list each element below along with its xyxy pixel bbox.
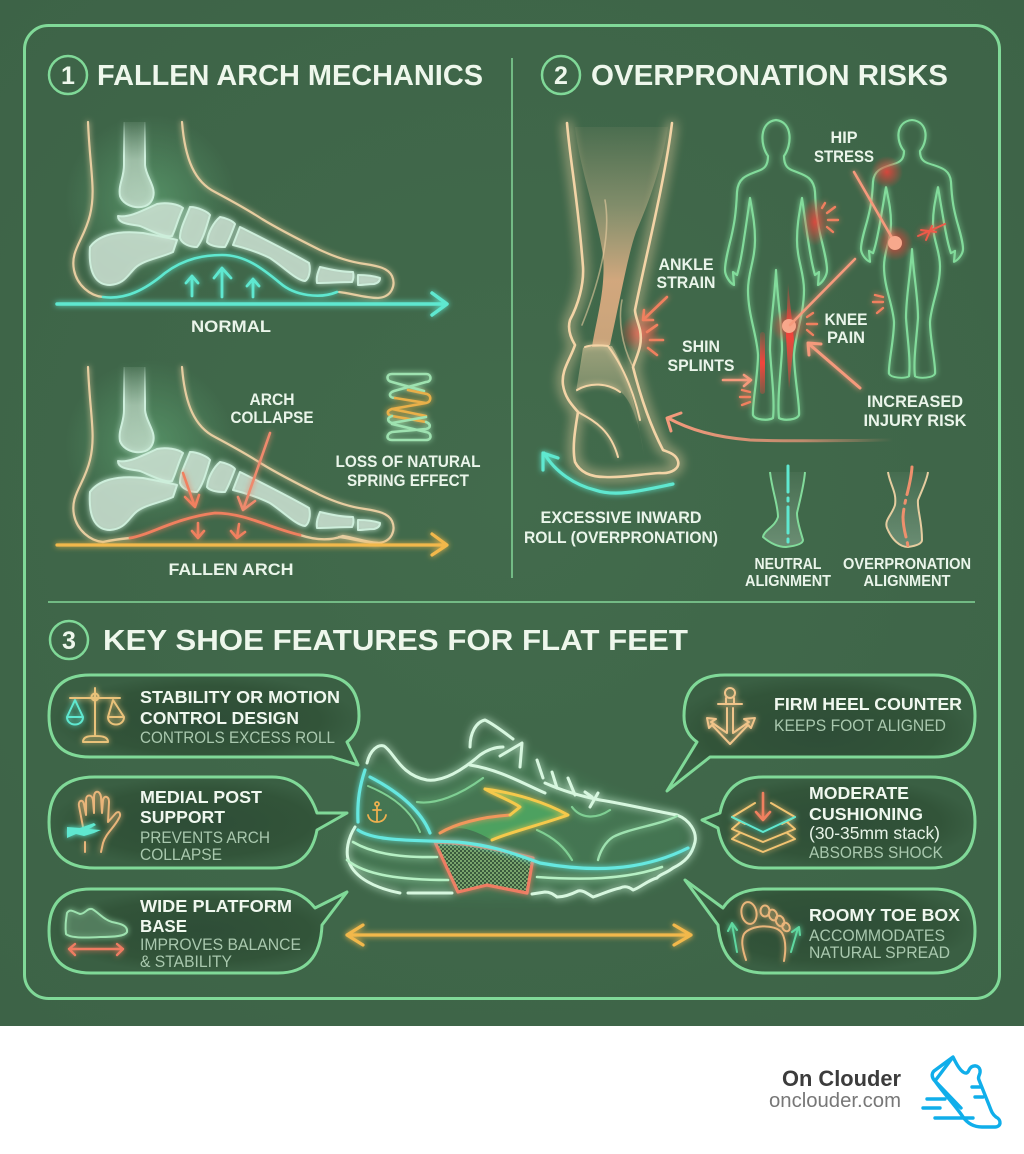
label: knee pain: PAIN bbox=[827, 328, 865, 347]
callout: medial post support: PREVENTS ARCH bbox=[140, 829, 270, 847]
callout: roomy toe box: ACCOMMODATES bbox=[809, 927, 945, 945]
callout: roomy toe box: NATURAL SPREAD bbox=[809, 944, 950, 962]
panel: key shoe features bbox=[49, 621, 975, 973]
label: arch collapse bbox=[230, 390, 314, 427]
line from knee to body bbox=[790, 259, 855, 325]
logo: On Clouder: On Clouder bbox=[782, 1066, 901, 1091]
callout: medial post support: MEDIAL POST bbox=[140, 787, 262, 807]
label: hip stress bbox=[814, 128, 874, 166]
callout: moderate cushioning: CUSHIONING bbox=[809, 804, 923, 824]
panel: fallen arch mechanics bbox=[49, 56, 483, 579]
label: fallen arch: FALLEN ARCH bbox=[168, 560, 294, 579]
label: arch collapse: ARCH bbox=[250, 390, 294, 409]
heading: section 2: OVERPRONATION RISKS bbox=[591, 60, 948, 92]
callout: stability or motion control bbox=[49, 675, 359, 765]
label: shin splints: SHIN bbox=[682, 337, 720, 356]
label: neutral alignment bbox=[745, 556, 831, 590]
cyan heel and midline bbox=[358, 770, 688, 869]
heading: section 1: 1 bbox=[61, 62, 75, 90]
icon: neutral alignment bbox=[763, 466, 805, 547]
label: arch collapse: COLLAPSE bbox=[230, 408, 314, 427]
callout: stability or motion control: CONTROL DESIGN bbox=[140, 708, 299, 728]
label: excessive inward roll bbox=[524, 508, 718, 547]
mesh panel bbox=[435, 842, 533, 893]
label: neutral alignment: NEUTRAL bbox=[754, 556, 822, 573]
swoosh fill bbox=[440, 789, 568, 840]
heading: section 3: 3 bbox=[62, 627, 76, 655]
callout: firm heel counter bbox=[667, 675, 975, 791]
callout: stability or motion control: CONTROLS EXCESS ROLL bbox=[140, 729, 335, 747]
illustration: ankle rear view bbox=[563, 123, 678, 477]
callout: moderate cushioning: MODERATE bbox=[809, 783, 909, 803]
normal ground arrow bbox=[57, 293, 447, 315]
horizontal divider bbox=[48, 601, 975, 603]
body outline: second view bbox=[861, 120, 963, 378]
label: ankle strain bbox=[656, 255, 716, 292]
callout: medial post support: COLLAPSE bbox=[140, 846, 222, 864]
label: loss of spring effect bbox=[336, 452, 480, 490]
label: shin splints bbox=[668, 337, 734, 375]
arch support arrows bbox=[186, 268, 259, 297]
callout: moderate cushioning: (30-35mm stack) bbox=[809, 823, 940, 843]
callout: medial post support bbox=[49, 777, 347, 868]
icon: running shoe mark bbox=[923, 1057, 1000, 1127]
icon: anchor bbox=[707, 688, 755, 744]
shoe glow halo bbox=[350, 735, 692, 897]
callout: wide platform base: & STABILITY bbox=[140, 953, 232, 971]
callout: wide platform base bbox=[49, 889, 347, 973]
label: loss of spring effect: SPRING EFFECT bbox=[347, 471, 470, 490]
label: hip stress: HIP bbox=[830, 128, 858, 147]
vertical divider bbox=[511, 58, 513, 578]
icon: toes spreading bbox=[728, 901, 800, 961]
collapse arrows bbox=[183, 433, 270, 538]
pain markers: front body bbox=[740, 198, 883, 405]
shoe outline strokes bbox=[347, 720, 695, 897]
curved arrow from body to ankle bbox=[667, 413, 893, 441]
white footer band bbox=[0, 1026, 1024, 1154]
icon: hand and support bbox=[67, 792, 120, 852]
fallen ground arrow bbox=[57, 534, 447, 555]
width arrow bbox=[347, 925, 691, 945]
label: ankle strain: STRAIN bbox=[656, 273, 716, 292]
label: excessive inward roll: ROLL (OVERPRONATION) bbox=[524, 528, 718, 547]
inward roll arrow bbox=[543, 453, 673, 493]
body outline: front view bbox=[725, 120, 827, 420]
logo: On Clouder bbox=[769, 1057, 1000, 1127]
callout: roomy toe box bbox=[685, 880, 975, 973]
heading: section 3: KEY SHOE FEATURES FOR FLAT FEET bbox=[103, 625, 688, 657]
heading: section 1: FALLEN ARCH MECHANICS bbox=[97, 60, 483, 92]
icon: cushion layers bbox=[732, 793, 795, 852]
callout: stability or motion control: STABILITY OR MOTION bbox=[140, 687, 340, 707]
callout: moderate cushioning bbox=[702, 777, 975, 868]
callout: wide platform base: WIDE PLATFORM bbox=[140, 896, 292, 916]
normal foot anatomy bbox=[73, 122, 393, 298]
heading: section 2: 2 bbox=[554, 62, 568, 90]
label: overpronation alignment: ALIGNMENT bbox=[864, 573, 951, 590]
callout: wide platform base: BASE bbox=[140, 916, 187, 936]
callout: wide platform base: IMPROVES BALANCE bbox=[140, 936, 301, 954]
label: hip stress: STRESS bbox=[814, 147, 874, 166]
label: overpronation alignment: OVERPRONATION bbox=[843, 556, 971, 573]
increased injury arrow bbox=[808, 343, 860, 388]
label: shin splints: SPLINTS bbox=[668, 356, 734, 375]
label: excessive inward roll: EXCESSIVE INWARD bbox=[540, 508, 702, 527]
label: increased injury risk: INJURY RISK bbox=[864, 411, 967, 430]
callout: moderate cushioning: ABSORBS SHOCK bbox=[809, 844, 943, 862]
logo: On Clouder: onclouder.com bbox=[769, 1090, 901, 1112]
label: normal: NORMAL bbox=[191, 317, 271, 336]
ankle strain rays and arrow bbox=[643, 297, 667, 355]
label: knee pain: KNEE bbox=[824, 310, 868, 329]
label: ankle strain: ANKLE bbox=[658, 255, 714, 274]
callout: firm heel counter: KEEPS FOOT ALIGNED bbox=[774, 717, 946, 735]
icon: small anchor on heel bbox=[368, 802, 386, 822]
callout: medial post support: SUPPORT bbox=[140, 807, 225, 827]
icon: compressed spring bbox=[388, 374, 430, 440]
label: increased injury risk bbox=[864, 392, 967, 430]
label: knee pain bbox=[824, 310, 868, 347]
icon: overpronation alignment bbox=[886, 467, 928, 547]
label: neutral alignment: ALIGNMENT bbox=[745, 573, 831, 590]
label: loss of spring effect: LOSS OF NATURAL bbox=[336, 452, 480, 471]
illustration: running shoe bbox=[347, 720, 695, 897]
glow behind fallen foot bbox=[65, 360, 235, 530]
callout: roomy toe box: ROOMY TOE BOX bbox=[809, 905, 960, 925]
shin arrow bbox=[723, 375, 751, 386]
glow behind normal foot bbox=[65, 115, 235, 285]
icon: wide base shoe bbox=[66, 909, 127, 955]
inner heel arc bbox=[368, 786, 420, 832]
fallen arch foot anatomy bbox=[73, 367, 393, 543]
swoosh logo strokes bbox=[440, 789, 568, 840]
label: overpronation alignment bbox=[843, 556, 971, 590]
icon: balance scales bbox=[67, 688, 124, 742]
label: increased injury risk: INCREASED bbox=[867, 392, 963, 411]
pain markers: second body bbox=[854, 156, 945, 261]
panel: overpronation risks bbox=[524, 56, 971, 590]
callout: firm heel counter: FIRM HEEL COUNTER bbox=[774, 694, 962, 714]
